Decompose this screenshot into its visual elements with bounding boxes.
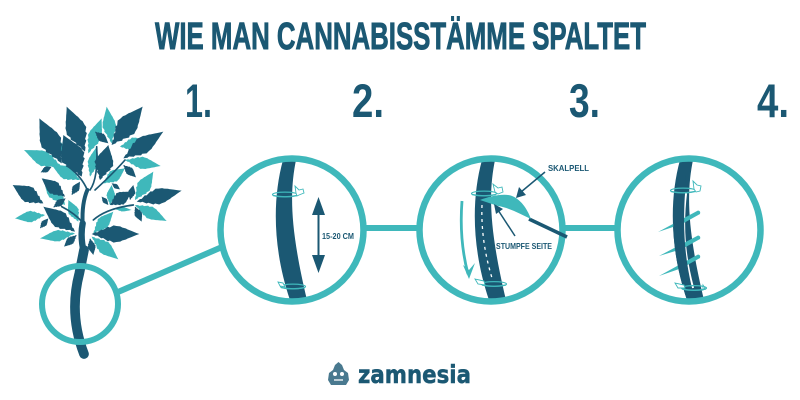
top tie <box>472 184 503 196</box>
panel: step 3 circle <box>420 158 589 302</box>
double arrow <box>312 197 325 273</box>
step number 4: 4. <box>757 74 789 127</box>
bottom tie <box>278 282 306 289</box>
magnifier ring on plant stem <box>42 266 118 342</box>
panel: step 4 circle <box>618 158 760 302</box>
bottom tie <box>475 279 506 286</box>
bottom tie <box>675 283 706 290</box>
step number 3: 3. <box>569 74 600 127</box>
stem <box>276 160 307 300</box>
left stem strip <box>673 194 692 298</box>
label: blunt side: STUMPFE SEITE <box>496 241 552 251</box>
panel: step 2 circle <box>220 158 364 302</box>
stem with cut line <box>475 160 506 300</box>
logo: zamnesia <box>328 360 471 389</box>
arrow to blunt side <box>494 204 515 236</box>
top tie <box>670 181 701 193</box>
measurement label: 15-20 CM <box>322 232 354 241</box>
top tie <box>272 186 304 197</box>
arrow to scalpel <box>516 172 545 198</box>
step number 2: 2. <box>352 74 384 127</box>
right stem half <box>673 160 704 300</box>
scalpel <box>480 195 567 237</box>
illustration: cannabis plant <box>8 100 183 354</box>
connector lines between circles <box>118 228 617 292</box>
downward cut arrow <box>461 201 475 279</box>
step number 1: 1. <box>185 74 212 127</box>
icon: monkey head <box>328 362 349 385</box>
grafting sticks <box>658 210 700 276</box>
label: scalpel: SKALPELL <box>548 163 589 173</box>
wordmark: zamnesia <box>358 360 471 389</box>
